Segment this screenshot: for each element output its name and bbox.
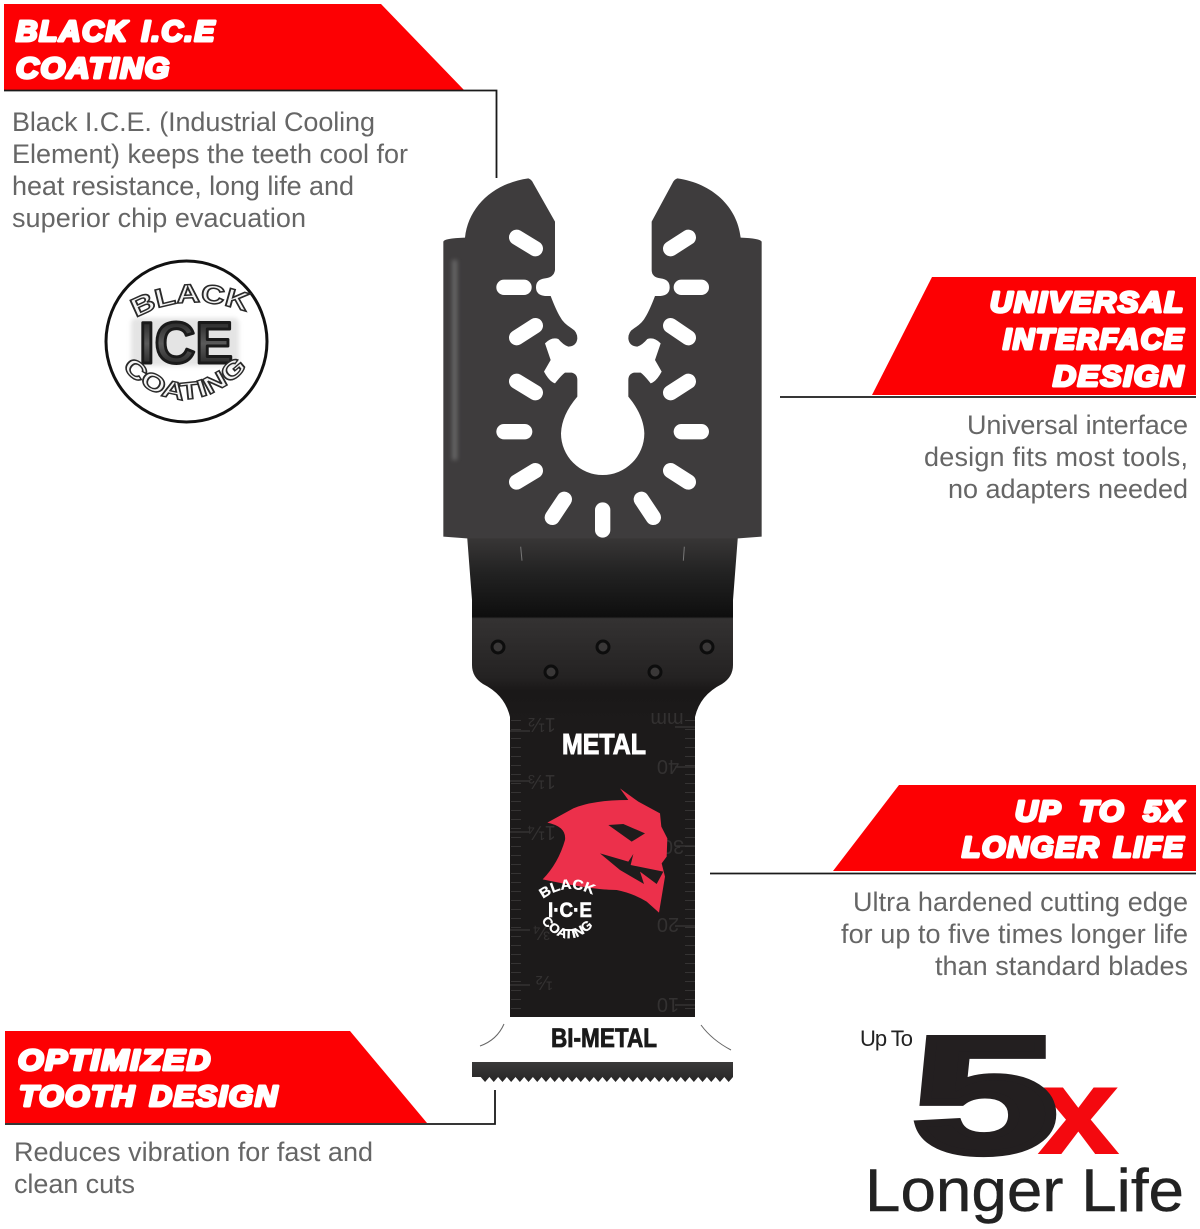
banner: universal interface design: INTERFACE [1003,324,1185,356]
banner: optimized tooth design: OPTIMIZED [18,1045,212,1077]
blade neck and shaft [467,535,738,1017]
icon: small black ice coating logo: I·C·E [548,899,592,922]
ruler markings: 30 [662,835,684,857]
banner: up to 5x longer life [833,785,1196,871]
text: coating description: superior chip evacuation [12,203,306,233]
panel: up to 5x longer life [710,785,1196,981]
ruler markings [510,708,695,1015]
icon: black ice coating badge: BLACK [129,284,252,318]
ruler markings: 40 [657,755,679,777]
banner: black ice coating [4,4,464,90]
panel: black ice coating [4,4,498,424]
label: metal: METAL [562,729,646,761]
text: coating description: heat resistance, long life and [12,171,354,201]
text: big 5: 5 [912,1003,1058,1187]
ruler markings: 10 [657,993,679,1015]
callout: up to 5x longer life [860,1003,1184,1224]
leader line: teeth to banner [5,1090,495,1124]
text: longer life description: than standard blades [935,951,1188,981]
text: longer life description: for up to five times longer life [841,919,1188,949]
blade mounting head [443,178,762,561]
banner: up to 5x longer life: LONGER LIFE [962,832,1185,864]
leader line: coating to blade [4,90,496,178]
text: longer life description [841,887,1188,981]
icon: black ice coating badge: ICE [139,311,233,376]
text: tooth description [14,1137,373,1199]
icon: black ice coating badge [104,260,268,424]
panel: optimized tooth design [5,1031,495,1199]
banner: up to 5x longer life: UP TO 5X [1015,796,1185,828]
ruler markings: 1½ [528,713,556,735]
text: interface description [924,410,1188,504]
icon: red demon head logo [543,788,667,913]
text: up to: Up To [860,1026,913,1051]
banner: universal interface design: DESIGN [1053,361,1185,393]
saw teeth [472,1062,733,1082]
text: tooth description: Reduces vibration for fast and [14,1137,373,1167]
blade illustration [443,178,762,1082]
ruler markings: 20 [657,913,679,935]
banner: black ice coating: BLACK I.C.E [16,16,216,48]
text: longer life: Longer Life [865,1157,1184,1224]
banner: optimized tooth design: TOOTH DESIGN [19,1081,279,1113]
text: interface description: no adapters needed [948,474,1188,504]
banner: universal interface design [872,277,1196,395]
ruler markings: 1¼ [528,821,556,843]
icon: small black ice coating logo: BLACK [538,879,596,898]
leader line: interface to blade [780,396,1196,398]
text: interface description: design fits most tools, [924,442,1188,472]
ruler markings: mm [650,708,684,730]
label: bi-metal: BI-METAL [551,1023,657,1053]
icon: small black ice coating logo: COATING [542,917,592,939]
ruler markings: ¾ [533,921,550,943]
rivet dots [492,641,713,678]
ruler markings: ½ [535,971,552,993]
text: longer life description: Ultra hardened cutting edge [853,887,1188,917]
bi-metal edge outlines [480,1024,731,1050]
banner: black ice coating: COATING [16,53,171,85]
text: red x: x [1039,1043,1118,1179]
leader line: life to blade [710,872,1196,874]
icon: black ice coating badge: COATING [125,358,246,402]
text: coating description [12,107,408,233]
text: coating description: Black I.C.E. (Industrial Cooling [12,107,375,137]
banner: optimized tooth design [5,1031,427,1123]
text: tooth description: clean cuts [14,1169,135,1199]
ruler markings: 1⅓ [528,770,556,792]
text: coating description: Element) keeps the teeth cool for [12,139,408,169]
banner: universal interface design: UNIVERSAL [990,287,1185,319]
panel: universal interface design [780,277,1196,504]
text: interface description: Universal interface [967,410,1188,440]
icon: small black ice coating logo [538,879,596,939]
